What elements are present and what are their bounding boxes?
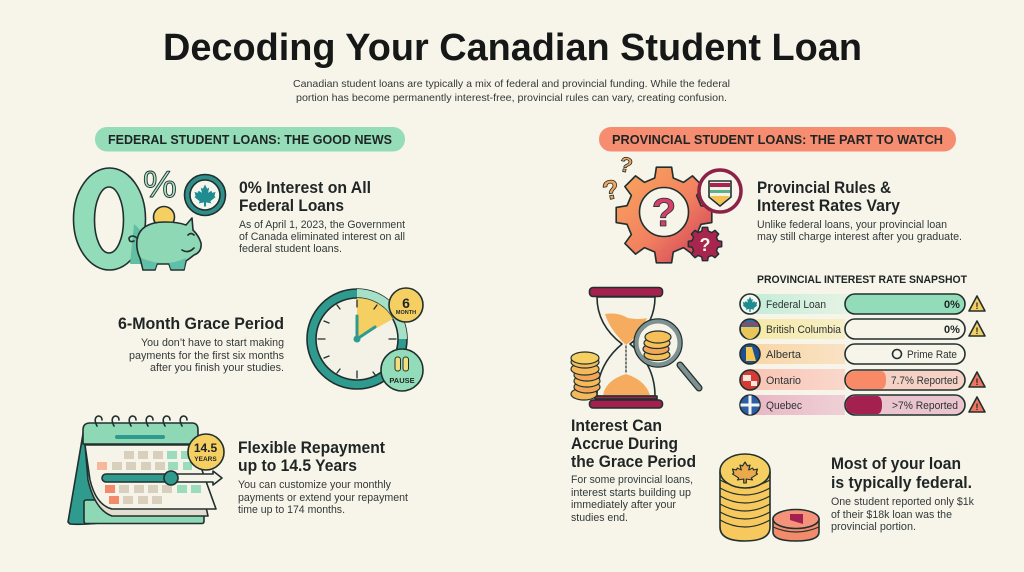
text: interest accrues: studies end. — [571, 512, 628, 524]
panel: provincial heading pill — [599, 127, 956, 152]
icon: gears with question marks: ? — [652, 191, 676, 235]
row: quebec: Quebec — [766, 400, 802, 412]
text: interest accrues: Accrue During — [571, 435, 678, 453]
text: zero percent interest: federal student loans. — [239, 243, 342, 255]
text: provincial rules — [757, 179, 962, 243]
row: alberta — [740, 344, 965, 364]
row: ontario: Ontario — [766, 375, 801, 387]
icon: calendar with slider: 14.5 — [194, 441, 218, 455]
row: alberta: Prime Rate — [907, 349, 957, 361]
text: interest accrues: For some provincial loans, — [571, 474, 693, 486]
icon: clock with pause — [307, 288, 423, 391]
text: mostly federal — [831, 455, 974, 533]
panel: provincial heading pill: PROVINCIAL STUDENT LOANS: THE PART TO WATCH — [612, 132, 943, 147]
text: flexible repayment: up to 14.5 Years — [238, 457, 357, 475]
icon: zero percent piggy bank — [74, 164, 226, 270]
text: provincial rules: Unlike federal loans, your provincial loan — [757, 219, 947, 231]
row: federal loan: 0% — [944, 299, 960, 311]
text: provincial rules: may still charge interest after you graduate. — [757, 231, 962, 243]
row: federal loan — [740, 294, 985, 314]
icon: clock with pause: MONTH — [396, 310, 416, 316]
panel: federal heading pill: FEDERAL STUDENT LOANS: THE GOOD NEWS — [108, 132, 392, 147]
row: federal loan: Federal Loan — [766, 299, 826, 311]
text: zero percent interest: 0% Interest on All — [239, 179, 371, 197]
text: grace period — [118, 315, 284, 374]
icon: clock with pause: 6 — [402, 295, 410, 311]
heading: rate snapshot: PROVINCIAL INTEREST RATE SNAPSHOT — [757, 274, 967, 286]
icon: hourglass with magnifier and coins — [571, 288, 699, 408]
title: Decoding Your Canadian Student Loan — [163, 27, 862, 69]
text: interest accrues: the Grace Period — [571, 453, 696, 471]
icon: coin stacks — [720, 454, 819, 541]
subtitle: Canadian student loans are typically a mix of federal and provincial funding. While the federal — [293, 78, 730, 90]
text: flexible repayment — [238, 439, 408, 516]
text: zero percent interest: Federal Loans — [239, 197, 344, 215]
row: british columbia: 0% — [944, 324, 960, 336]
text: grace period: payments for the first six months — [129, 350, 284, 362]
text: mostly federal: provincial portion. — [831, 521, 916, 533]
text: mostly federal: Most of your loan — [831, 455, 961, 473]
subtitle — [293, 78, 730, 104]
panel: federal heading pill — [95, 127, 405, 152]
text: mostly federal: is typically federal. — [831, 474, 972, 492]
text: interest accrues: interest starts building up — [571, 487, 691, 499]
icon: gears with question marks: ? — [600, 174, 622, 206]
text: grace period: 6-Month Grace Period — [118, 315, 284, 333]
row: quebec: >7% Reported — [892, 400, 958, 412]
text: flexible repayment: Flexible Repayment — [238, 439, 385, 457]
subtitle: portion has become permanently interest-free, provincial rules can vary, creating confusion. — [296, 92, 727, 104]
icon: clock with pause: PAUSE — [389, 376, 415, 385]
text: flexible repayment: payments or extend your repayment — [238, 492, 408, 504]
icon: gears with question marks: ? — [700, 235, 710, 255]
icon: gears with question marks: ? — [617, 153, 635, 178]
text: zero percent interest: of Canada eliminated interest on all — [239, 231, 405, 243]
text: zero percent interest — [239, 179, 405, 255]
text: interest accrues: Interest Can — [571, 417, 662, 435]
icon: calendar with slider: YEARS — [194, 456, 217, 463]
text: flexible repayment: You can customize your monthly — [238, 479, 391, 491]
row: quebec — [740, 395, 985, 415]
row: quebec: ! — [976, 402, 978, 412]
text: grace period: You don’t have to start making — [141, 337, 284, 349]
row: federal loan: ! — [976, 301, 978, 311]
icon: zero percent piggy bank: % — [143, 164, 177, 206]
row: british columbia — [740, 319, 985, 339]
row: ontario: 7.7% Reported — [891, 375, 958, 387]
icon: gears with question marks — [600, 153, 741, 263]
row: ontario: ! — [976, 377, 978, 387]
icon: calendar with slider — [68, 416, 224, 524]
text: mostly federal: One student reported only $1k — [831, 496, 974, 508]
text: interest accrues — [571, 417, 696, 524]
row: alberta: Alberta — [766, 349, 802, 361]
chart: provincial rate table — [740, 294, 985, 415]
text: interest accrues: immediately after your — [571, 499, 676, 511]
text: flexible repayment: time up to 174 months. — [238, 504, 345, 516]
row: british columbia: ! — [976, 326, 978, 336]
text: mostly federal: of their $18k loan was the — [831, 509, 952, 521]
text: zero percent interest: As of April 1, 2023, the Government — [239, 219, 405, 231]
row: british columbia: British Columbia — [766, 324, 842, 336]
text: provincial rules: Interest Rates Vary — [757, 197, 901, 215]
text: provincial rules: Provincial Rules & — [757, 179, 891, 197]
text: grace period: after you finish your studies. — [150, 362, 284, 374]
row: ontario — [740, 369, 985, 390]
